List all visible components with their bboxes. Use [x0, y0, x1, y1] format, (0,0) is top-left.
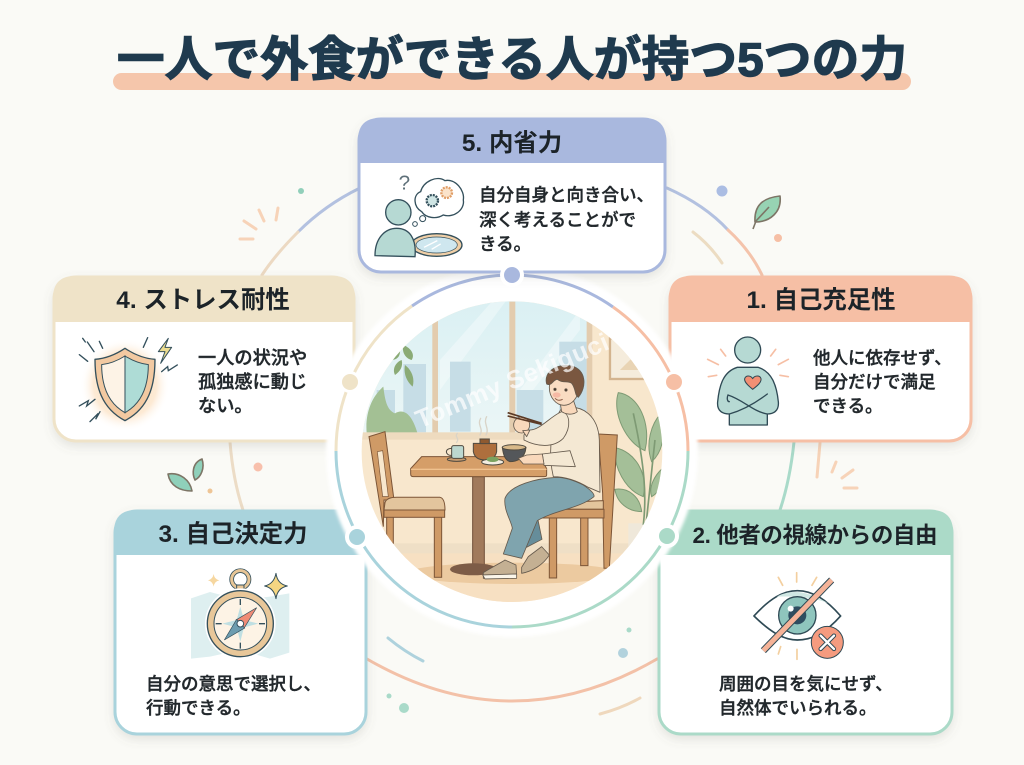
icon: leaves left	[168, 459, 203, 491]
decorative ticks, dots and leaves	[168, 186, 857, 714]
floor	[393, 544, 630, 554]
text 5: 自分自身と向き合い、	[479, 185, 654, 205]
heading 2: 2. 他者の視線からの自由	[692, 523, 938, 548]
right chair	[536, 434, 617, 578]
window	[360, 300, 593, 440]
man	[483, 365, 600, 579]
icon: person thinking at mirror	[375, 171, 464, 257]
text 5: きる。	[479, 234, 531, 254]
panel: 4 stress tolerance	[53, 276, 355, 441]
jeans	[526, 520, 542, 548]
outer orbit arcs	[230, 188, 794, 701]
steam	[456, 417, 487, 442]
panel: 5 introspection	[358, 118, 666, 272]
title	[113, 34, 911, 90]
text 2: 自然体でいられる。	[719, 698, 876, 718]
plant	[615, 393, 664, 553]
panel 1 header band	[669, 276, 972, 322]
inner colored ring	[336, 275, 688, 627]
panel: 1 self-sufficiency	[669, 276, 972, 441]
text 5	[479, 185, 654, 254]
panel 4 header band	[53, 276, 355, 322]
wall	[360, 300, 667, 607]
heading 3: 3. 自己決定力	[158, 521, 308, 548]
text 1: 他人に依存せず、	[813, 348, 952, 368]
heading 4: 4. ストレス耐性	[116, 287, 290, 314]
icon: person thinking at mirror: ?	[399, 171, 410, 194]
heading 1: 1. 自己充足性	[746, 287, 896, 314]
text 4: ない。	[198, 396, 253, 416]
table top	[411, 457, 547, 477]
panel: 3 self-determination	[114, 510, 367, 734]
picture frame	[608, 337, 644, 380]
panel: 2 freedom from others' gaze	[658, 510, 953, 734]
panel 3 header band	[114, 510, 367, 555]
central illustration: man dining alone	[360, 300, 667, 607]
text 4: 孤独感に動じ	[198, 372, 307, 392]
lower arm	[542, 451, 575, 467]
icon: leaf top right	[753, 196, 780, 229]
heading 5: 5. 内省力	[462, 130, 562, 157]
text 2	[719, 674, 893, 718]
icon: crossed eye	[754, 573, 843, 659]
text 3: 行動できる。	[146, 698, 251, 718]
connector dots	[339, 263, 685, 549]
chopsticks	[508, 413, 542, 424]
watermark: Tommy Sekiguci	[412, 328, 613, 434]
text 1: 自分だけで満足	[813, 372, 936, 392]
neck and head	[560, 400, 577, 414]
white halo behind photo	[326, 265, 698, 637]
text 3	[146, 674, 321, 718]
text 4	[198, 348, 307, 416]
title text: 一人で外食ができる人が持つ5つの力	[117, 34, 907, 87]
text 3: 自分の意思で選択し、	[146, 674, 321, 694]
sweater body	[551, 407, 600, 492]
cup, teapot, bowl, dish	[446, 439, 526, 465]
left chair	[369, 432, 445, 577]
icon: person with heart	[708, 337, 788, 425]
shoes	[522, 547, 549, 573]
panel 2 header band	[658, 510, 953, 555]
text 1: できる。	[813, 396, 883, 416]
panel 5 header band	[358, 118, 666, 163]
title underline	[113, 73, 911, 90]
text 5: 深く考えることがで	[479, 210, 636, 230]
text 2: 周囲の目を気にせず、	[719, 674, 893, 694]
text 1	[813, 348, 952, 416]
table pedestal	[473, 477, 484, 567]
raised arm	[524, 412, 569, 445]
icon: shield	[79, 338, 177, 432]
text 4: 一人の状況や	[198, 348, 307, 368]
hands	[518, 454, 544, 464]
icon: compass and map	[191, 571, 289, 659]
